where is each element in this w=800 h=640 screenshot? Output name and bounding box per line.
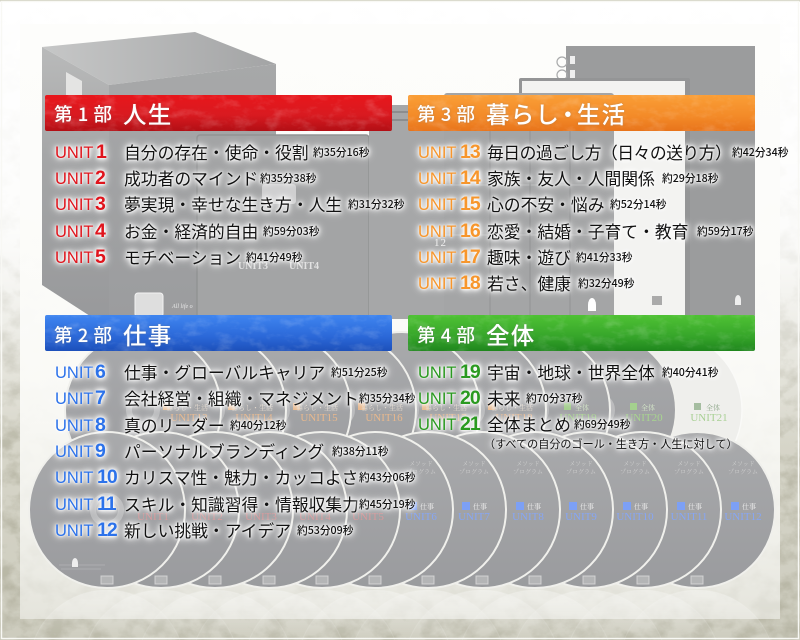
disc: UNIT1 <box>29 432 185 588</box>
unit 12: 12 <box>97 519 117 541</box>
unit 6 <box>55 360 391 386</box>
disc: UNIT8 <box>404 432 560 588</box>
unit 5: UNIT <box>55 249 94 267</box>
unit 8: 8 <box>95 414 105 436</box>
disc: UNIT4 <box>191 432 347 588</box>
unit 3 <box>51 192 408 218</box>
unit 18 <box>414 270 634 296</box>
heading: part 2: 第2部 <box>54 322 117 348</box>
unit 19: 19 <box>460 361 480 383</box>
unit 7: 7 <box>95 387 105 409</box>
unit 2 <box>51 166 320 192</box>
unit 2: 約35分38秒 <box>260 171 316 186</box>
unit 3: 夢実現・幸せな生き方・人生 <box>124 192 342 216</box>
disc: UNIT6: 仕事 <box>420 502 434 511</box>
heading: part 1 <box>54 96 172 130</box>
disc: UNIT16 <box>260 332 416 488</box>
unit 9: パーソナルブランディング <box>124 439 324 463</box>
disc: UNIT5: UNIT5 <box>352 511 384 523</box>
disc: UNIT16: 暮らし・生活 <box>361 403 403 412</box>
disc: UNIT20 <box>520 332 676 488</box>
disc: UNIT8: UNIT8 <box>512 511 544 523</box>
disc: UNIT19 <box>454 332 610 488</box>
unit 2: 2 <box>95 167 105 189</box>
unit 14: 14 <box>460 167 480 189</box>
disc: UNIT11: 仕事 <box>688 502 702 511</box>
disc: UNIT10: UNIT10 <box>616 511 654 523</box>
unit 1 <box>51 140 373 166</box>
disc: UNIT6: メソッド <box>409 461 433 468</box>
disc: UNIT19: 全体 <box>575 403 589 412</box>
disc: UNIT13: UNIT13 <box>170 412 208 424</box>
unit 7: UNIT <box>55 390 94 408</box>
disc: UNIT11: プログラム <box>674 468 704 476</box>
unit 19: 宇宙・地球・世界全体 <box>487 360 655 384</box>
unit 14: 家族・友人・人間関係 <box>487 166 655 190</box>
disc: UNIT8: プログラム <box>513 468 543 476</box>
unit 13: 毎日の過ごし方（日々の送り方） <box>487 140 731 164</box>
disc: UNIT18: 暮らし・生活 <box>491 403 533 412</box>
disc: UNIT1: UNIT1 <box>137 511 169 523</box>
unit 21: 約69分49秒 <box>574 417 630 432</box>
unit 9: 9 <box>95 440 105 462</box>
banner: part 2 blue <box>45 315 392 351</box>
unit 11 <box>51 492 420 518</box>
unit 16: UNIT <box>418 223 456 241</box>
disc: UNIT11: メソッド <box>677 461 701 468</box>
unit 17: UNIT <box>418 249 456 267</box>
disc: UNIT13: 暮らし・生活 <box>166 403 208 412</box>
product: dark book: UNIT3 <box>238 261 268 272</box>
heading: part 4 <box>417 317 535 351</box>
unit 1: 約35分16秒 <box>313 145 369 160</box>
disc: UNIT8: メソッド <box>516 461 540 468</box>
disc: UNIT6: プログラム <box>406 468 436 476</box>
unit 15: 15 <box>460 193 480 215</box>
unit 17: 17 <box>460 246 480 268</box>
heading: part 3 <box>417 96 626 130</box>
product: dark book <box>197 105 445 319</box>
disc: UNIT19: UNIT19 <box>559 412 597 424</box>
unit 11: スキル・知識習得・情報収集力 <box>124 492 359 516</box>
unit 17: 約41分33秒 <box>576 250 632 265</box>
disc: UNIT9: 仕事 <box>580 502 594 511</box>
disc: UNIT18: UNIT18 <box>495 412 533 424</box>
back row discs: UNIT 13-21 <box>65 332 742 488</box>
unit 21 note: （すべての自分のゴール・生き方・人生に対して） <box>484 436 738 452</box>
disc: UNIT15: 暮らし・生活 <box>296 403 338 412</box>
disc: UNIT12: プログラム <box>728 468 758 476</box>
disc: UNIT21: 全体 <box>706 403 720 412</box>
unit 16: 16 <box>460 220 480 242</box>
unit 8 <box>55 412 290 438</box>
unit 19: UNIT <box>418 364 456 382</box>
unit 18: 18 <box>460 272 480 294</box>
unit 8: 約40分12秒 <box>230 418 286 433</box>
unit 5: モチベーション <box>124 245 241 269</box>
unit 16: 約59分17秒 <box>697 224 753 239</box>
disc: UNIT14 <box>130 332 286 488</box>
product: dark book: T8 <box>370 246 384 260</box>
unit 10: UNIT <box>55 469 94 487</box>
unit 12: 約53分09秒 <box>297 523 353 538</box>
disc: UNIT18 <box>390 332 546 488</box>
unit 10: 10 <box>97 466 117 488</box>
disc: UNIT13 <box>65 332 221 488</box>
unit 6: UNIT <box>55 364 94 382</box>
disc: UNIT17: UNIT17 <box>429 412 467 424</box>
disc: UNIT9: メソッド <box>569 461 593 468</box>
unit 9 <box>52 438 392 463</box>
unit 11: 11 <box>97 493 116 515</box>
disc: UNIT7: プログラム <box>459 468 489 476</box>
unit 1: 1 <box>96 141 106 163</box>
unit 20: 約70分37秒 <box>526 391 582 406</box>
unit 21: UNIT <box>418 416 456 434</box>
unit 14: 約29分18秒 <box>662 171 718 186</box>
unit 5: 約41分49秒 <box>246 250 302 265</box>
disc: UNIT15: UNIT15 <box>300 412 338 424</box>
heading: part 3: 暮らし・生活 <box>486 96 626 130</box>
product: dark book: UNIT4 <box>289 261 319 272</box>
unit 4: 約59分03秒 <box>263 224 319 239</box>
unit 9: 約38分11秒 <box>332 444 388 459</box>
heading: part 1: 人生 <box>123 96 172 130</box>
disc: UNIT12: メソッド <box>731 461 755 468</box>
unit 19: 約40分41秒 <box>662 365 718 380</box>
heading: part 2: 仕事 <box>123 317 172 351</box>
unit 1: 自分の存在・使命・役割 <box>124 140 309 164</box>
unit 12 <box>51 517 358 544</box>
disc: UNIT7: 仕事 <box>473 502 487 511</box>
banner backgrounds <box>45 95 755 351</box>
unit 17: 趣味・遊び <box>487 245 571 269</box>
unit 6: 仕事・グローバルキャリア <box>124 360 325 384</box>
unit 10: カリスマ性・魅力・カッコよさ <box>124 465 358 489</box>
unit 8: UNIT <box>55 417 94 435</box>
disc: UNIT21: UNIT21 <box>690 412 728 424</box>
disc: UNIT9: プログラム <box>566 468 596 476</box>
unit 13: UNIT <box>418 144 456 162</box>
disc: UNIT7: UNIT7 <box>458 511 490 523</box>
unit 14: UNIT <box>418 170 456 188</box>
disc: UNIT9 <box>457 432 613 588</box>
unit 2: 成功者のマインド <box>124 166 258 190</box>
unit 12: 新しい挑戦・アイデア <box>124 518 291 542</box>
unit 5: 5 <box>95 246 105 268</box>
unit 6: 6 <box>95 361 105 383</box>
unit 2: UNIT <box>55 170 94 188</box>
unit 15: 心の不安・悩み <box>487 192 604 216</box>
unit 4 <box>51 218 324 245</box>
disc: UNIT2 <box>83 432 239 588</box>
unit 8: 真のリーダー <box>124 413 225 437</box>
disc: UNIT12: UNIT12 <box>724 511 762 523</box>
disc: UNIT11: UNIT11 <box>671 511 707 523</box>
disc: UNIT6: UNIT6 <box>405 511 437 523</box>
disc reflections <box>34 590 770 640</box>
product: box set <box>42 32 276 320</box>
unit 19 <box>414 359 719 386</box>
unit 18: 若さ、健康 <box>487 271 571 295</box>
disc: UNIT21 <box>586 332 742 488</box>
banner: part 1 red <box>45 95 392 131</box>
heading: part 3: 第3部 <box>417 101 480 127</box>
unit 5 <box>51 244 306 270</box>
unit 10: 約43分06秒 <box>359 470 415 485</box>
unit 18: 約32分49秒 <box>578 276 634 291</box>
unit 11: UNIT <box>55 496 94 514</box>
banner: part 4 green <box>408 315 755 351</box>
disc: UNIT15 <box>195 332 351 488</box>
unit 3: 3 <box>95 193 105 215</box>
unit 17 <box>414 244 632 270</box>
unit 16 <box>414 218 755 244</box>
unit 4: UNIT <box>55 223 94 241</box>
unit 7: 会社経営・組織・マネジメント <box>124 386 359 410</box>
unit 6: 約51分25秒 <box>331 365 387 380</box>
product: workbook stack <box>434 46 755 318</box>
disc: UNIT3 <box>137 432 293 588</box>
unit 14 <box>414 166 722 192</box>
unit 7 <box>55 385 418 412</box>
product: workbook stack: 12 <box>434 237 447 249</box>
disc: UNIT17 <box>324 332 480 488</box>
unit 9: UNIT <box>55 443 94 461</box>
unit 21: 21 <box>460 413 480 435</box>
banner: part 3 orange <box>408 95 755 131</box>
heading: part 1: 第1部 <box>54 101 117 127</box>
unit 15: UNIT <box>418 196 456 214</box>
unit 21: 全体まとめ <box>487 412 571 436</box>
unit 4: お金・経済的自由 <box>124 219 258 243</box>
disc: UNIT12 <box>619 432 775 588</box>
unit 20: 未来 <box>487 386 521 410</box>
disc: UNIT20: 全体 <box>641 403 655 412</box>
disc: UNIT6 <box>297 432 453 588</box>
disc: UNIT20: UNIT20 <box>625 412 663 424</box>
unit 18: UNIT <box>418 275 456 293</box>
disc: UNIT16: UNIT16 <box>365 412 403 424</box>
disc: UNIT14: 暮らし・生活 <box>231 403 273 412</box>
unit 13: 約42分34秒 <box>732 145 788 160</box>
disc: UNIT7: メソッド <box>462 461 486 468</box>
heading: part 2 <box>54 317 172 351</box>
unit 3: 約31分32秒 <box>348 197 404 212</box>
unit 11: 約45分19秒 <box>359 497 415 512</box>
unit 16: 恋愛・結婚・子育て・教育 <box>487 219 688 243</box>
disc: UNIT2: UNIT2 <box>191 511 223 523</box>
disc: UNIT14: UNIT14 <box>235 412 273 424</box>
unit 20: UNIT <box>418 390 456 408</box>
disc: UNIT17: 暮らし・生活 <box>425 403 467 412</box>
unit 15 <box>414 191 666 217</box>
unit 20 <box>412 385 586 410</box>
unit 10 <box>51 464 419 491</box>
disc: UNIT3: UNIT3 <box>245 511 277 523</box>
disc: UNIT4: UNIT4 <box>299 511 331 523</box>
disc: UNIT10: メソッド <box>623 461 647 468</box>
unit 7: 約35分34秒 <box>359 391 415 406</box>
unit 1: UNIT <box>55 144 94 162</box>
unit 3: UNIT <box>55 196 94 214</box>
disc: UNIT7 <box>350 432 506 588</box>
disc: UNIT10: 仕事 <box>634 502 648 511</box>
disc: UNIT11 <box>565 432 721 588</box>
unit 13: 13 <box>460 141 480 163</box>
disc: UNIT8: 仕事 <box>527 502 541 511</box>
front row discs: UNIT 1-12 <box>29 432 775 588</box>
disc: UNIT5 <box>244 432 400 588</box>
disc: UNIT9: UNIT9 <box>565 511 597 523</box>
unit 15: 約52分14秒 <box>610 197 666 212</box>
disc: UNIT10 <box>511 432 667 588</box>
product: box set: All life o <box>171 303 193 310</box>
heading: part 4: 第4部 <box>417 322 480 348</box>
unit 13 <box>414 139 788 166</box>
unit 21 <box>415 411 634 437</box>
disc: UNIT10: プログラム <box>620 468 650 476</box>
unit 12: UNIT <box>55 522 94 540</box>
heading: part 4: 全体 <box>486 317 535 351</box>
unit 4: 4 <box>95 220 105 242</box>
disc: UNIT12: 仕事 <box>742 502 756 511</box>
unit 20: 20 <box>460 387 480 409</box>
